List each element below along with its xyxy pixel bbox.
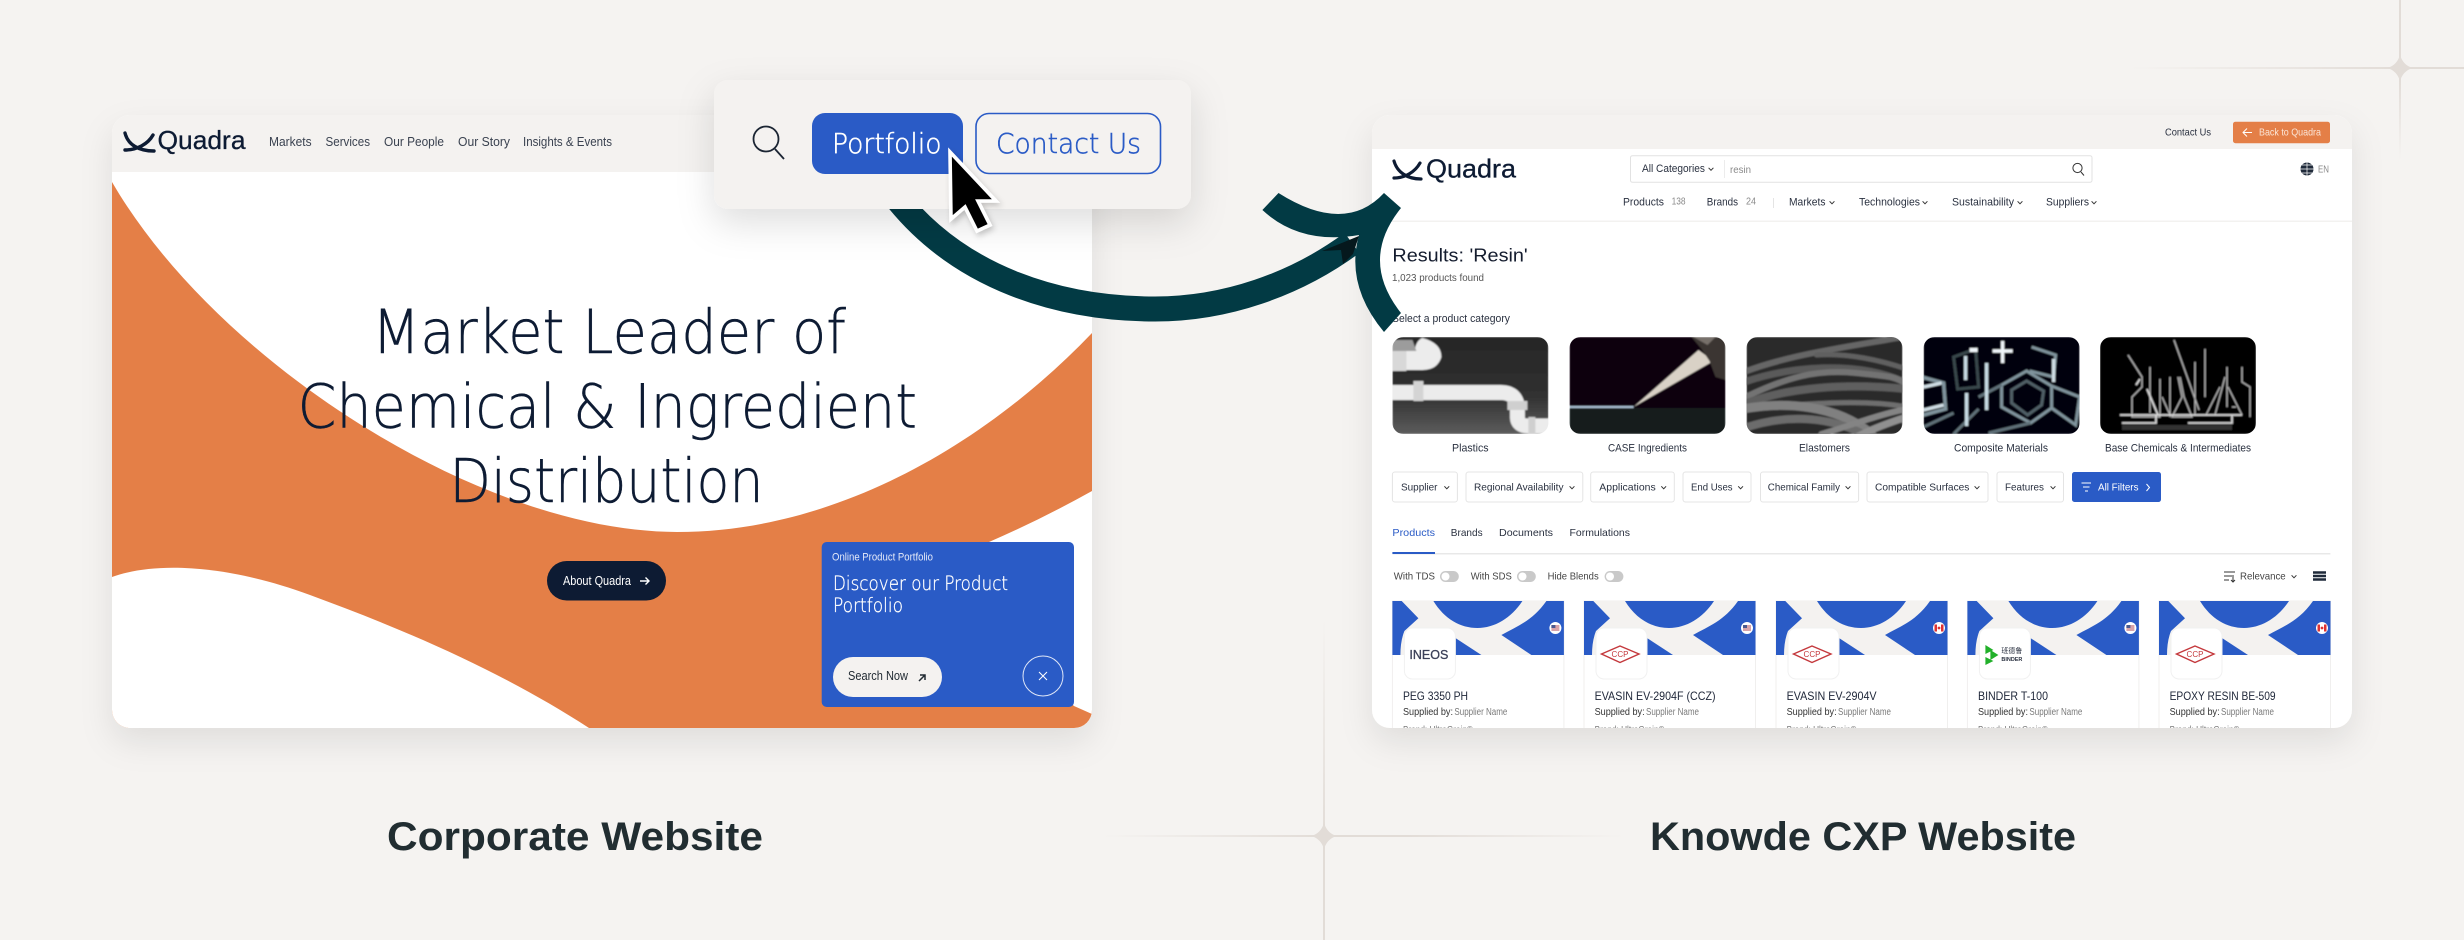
product card: BINDER T-100 — [1967, 601, 2139, 741]
search box: resin — [1730, 164, 1751, 176]
logo: Quadra: Quadra — [1426, 154, 1517, 184]
main navigation: Technologies — [1859, 196, 1920, 208]
navigation links: Our Story — [458, 134, 510, 149]
product card: EVASIN EV-2904V — [1776, 601, 1948, 741]
button: Portfolio — [812, 113, 963, 174]
product card: PEG 3350 PH: Supplier Name — [1454, 707, 1508, 718]
logo: Quadra — [1392, 158, 1516, 183]
filter bar: Supplier — [1401, 482, 1438, 494]
orange wave shape — [112, 182, 1092, 728]
panel: corporate website screenshot — [112, 115, 1092, 728]
icon: mouse cursor — [950, 152, 996, 231]
main navigation: Suppliers — [2046, 196, 2089, 208]
category: Base Chemicals and Intermediates: Base Chemicals & Intermediates — [2105, 443, 2251, 455]
product card: EVASIN EV-2904F (CCZ): Supplier Name — [1646, 707, 1699, 718]
button: Back to Quadra — [2233, 122, 2330, 143]
navigation links: Our People — [384, 134, 444, 149]
navigation links: Markets — [269, 134, 312, 149]
filter bar: Regional Availability — [1474, 482, 1564, 494]
toggles and sort controls: With TDS — [1394, 570, 1435, 582]
product card: PEG 3350 PH — [1392, 601, 1564, 741]
product card: BINDER T-100: 班德鲁 — [2001, 646, 2022, 655]
product card: BINDER T-100: BINDER T-100 — [1978, 689, 2048, 703]
product card: EVASIN EV-2904F (CCZ): Supplied by: — [1595, 707, 1645, 718]
results count: 1,023 products found — [1392, 272, 1484, 284]
arrow: from portfolio button to Knowde website — [894, 193, 1401, 332]
white lower right wave — [989, 491, 1092, 714]
hero heading — [298, 297, 917, 517]
product card: PEG 3350 PH: INEOS — [1409, 647, 1449, 662]
product card: EVASIN EV-2904F (CCZ): Brand: UltraGrain® — [1595, 725, 1665, 736]
category: Plastics — [1392, 337, 1552, 455]
promo card: online product portfolio: Portfolio — [833, 594, 903, 617]
main navigation: Sustainability — [1952, 196, 2014, 208]
toggles and sort controls: Relevance — [2240, 570, 2286, 582]
hero heading: Distribution — [450, 446, 764, 517]
language selector — [2300, 162, 2329, 176]
result tabs: Formulations — [1570, 527, 1630, 539]
filter bar: Compatible Surfaces — [1875, 482, 1969, 494]
toggles and sort controls: With SDS — [1471, 570, 1512, 582]
button: All Filters — [2072, 472, 2161, 502]
main navigation — [1372, 196, 2352, 222]
category prompt: Select a product category — [1392, 313, 1510, 325]
decorative sparkle lines — [1103, 0, 2464, 940]
product card: EVASIN EV-2904V: EVASIN EV-2904V — [1787, 689, 1877, 703]
button: Contact Us — [976, 114, 1160, 174]
icon: search — [754, 126, 784, 159]
navigation links — [269, 134, 612, 149]
promo card: online product portfolio — [822, 542, 1074, 707]
product card: PEG 3350 PH: Brand: UltraGrain® — [1403, 725, 1474, 736]
filter bar: Chemical Family — [1768, 482, 1841, 494]
callout: nav bar buttons enlarged — [714, 80, 1191, 209]
caption: Corporate Website: Corporate Website — [387, 815, 763, 859]
main navigation: 24 — [1746, 196, 1756, 208]
nav bar background — [112, 115, 714, 172]
product card: PEG 3350 PH: Supplied by: — [1403, 707, 1453, 718]
category: Composite Materials — [1922, 337, 2080, 455]
main navigation: 138 — [1672, 196, 1686, 208]
result tabs — [1392, 527, 2330, 554]
category: Plastics: Plastics — [1452, 443, 1489, 455]
product card: EPOXY RESIN BE-509: Brand: UltraGrain® — [2170, 725, 2240, 736]
utility bar — [1372, 115, 2352, 149]
language selector: EN — [2318, 164, 2329, 176]
logo: Quadra: Quadra — [158, 125, 246, 155]
caption: Knowde CXP Website: Knowde CXP Website — [1650, 815, 2076, 859]
category: CASE Ingredients: CASE Ingredients — [1608, 443, 1687, 455]
product card: PEG 3350 PH: PEG 3350 PH — [1403, 689, 1468, 703]
hero heading: Market Leader of — [372, 297, 846, 368]
button: All Filters: All Filters — [2098, 482, 2138, 494]
navigation links: Insights & Events — [523, 134, 612, 149]
result tabs: Products — [1392, 527, 1435, 539]
category: Elastomers: Elastomers — [1799, 443, 1850, 455]
main navigation: Brands — [1707, 196, 1738, 208]
button: Portfolio: Portfolio — [832, 127, 942, 160]
button: Contact Us: Contact Us — [996, 127, 1141, 160]
product card: BINDER T-100: Supplier Name — [2029, 707, 2083, 718]
white lower left wave — [112, 568, 589, 728]
results heading: Results: 'Resin' — [1392, 246, 1528, 266]
utility bar: Contact Us — [2165, 126, 2211, 138]
result tabs: Documents — [1499, 527, 1553, 539]
product card: EPOXY RESIN BE-509 — [2159, 601, 2330, 741]
product card: BINDER T-100: Brand: UltraGrain® — [1978, 725, 2049, 736]
button: Search Now: Search Now — [848, 668, 909, 683]
product card: EPOXY RESIN BE-509: EPOXY RESIN BE-509 — [2170, 689, 2276, 703]
button: About Quadra: About Quadra — [563, 574, 631, 588]
product card: EVASIN EV-2904V: Supplier Name — [1838, 707, 1891, 718]
product card: BINDER T-100: Supplied by: — [1978, 707, 2028, 718]
close button — [1023, 656, 1063, 696]
panel: Knowde CXP website screenshot — [1372, 115, 2352, 741]
toggles and sort controls: Hide Blends — [1548, 570, 1599, 582]
filter bar — [1392, 472, 2161, 502]
product card: EPOXY RESIN BE-509: Supplier Name — [2221, 707, 2274, 718]
hero heading: Chemical & Ingredient — [298, 372, 917, 442]
product card: EVASIN EV-2904V: Supplied by: — [1787, 707, 1837, 718]
product card: BINDER T-100: BINDER — [2001, 657, 2022, 663]
navigation links: Services — [326, 134, 370, 149]
filter bar: End Uses — [1691, 482, 1733, 494]
category: CASE Ingredients — [1570, 337, 1726, 455]
filter bar: Applications — [1599, 482, 1656, 494]
promo card: online product portfolio: Online Product Portfolio — [832, 552, 933, 564]
product card: EVASIN EV-2904F (CCZ): EVASIN EV-2904F (CCZ) — [1595, 689, 1716, 703]
button: Search Now — [833, 657, 942, 697]
promo card: online product portfolio: Discover our Product — [833, 572, 1008, 595]
search box: All Categories — [1642, 163, 1705, 175]
button: Back to Quadra: Back to Quadra — [2259, 127, 2321, 139]
main navigation: Products — [1623, 196, 1664, 208]
result tabs: Brands — [1451, 527, 1483, 539]
category: Elastomers — [1742, 337, 1906, 455]
product card: EVASIN EV-2904V: Brand: UltraGrain® — [1787, 725, 1857, 736]
category: Composite Materials: Composite Materials — [1954, 443, 2048, 455]
category: Base Chemicals and Intermediates — [2100, 337, 2256, 455]
button: About Quadra — [547, 561, 666, 600]
product card: EVASIN EV-2904F (CCZ) — [1584, 601, 1756, 741]
toggles and sort controls — [1394, 570, 2326, 582]
main navigation: Markets — [1789, 196, 1826, 208]
filter bar: Features — [2005, 482, 2044, 494]
product card: EPOXY RESIN BE-509: Supplied by: — [2170, 707, 2220, 718]
search box — [1630, 156, 2092, 182]
